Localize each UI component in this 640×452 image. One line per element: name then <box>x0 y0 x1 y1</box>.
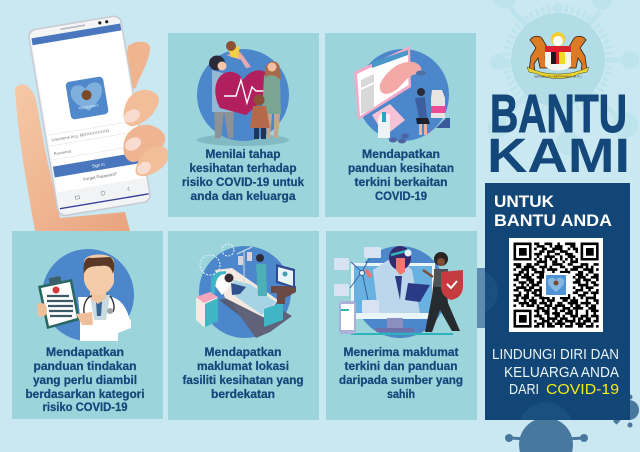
tagline: COVID-19 <box>546 381 619 398</box>
text: yang perlu diambil <box>33 375 137 387</box>
panel 4: facility location <box>168 231 319 420</box>
app icon: MySejahtera <box>78 103 99 111</box>
title: BANTU KAMI <box>487 84 630 183</box>
hand palm <box>15 84 130 231</box>
panel 1: assess health <box>168 33 319 217</box>
text <box>182 347 304 401</box>
panel 2: latest guidance <box>325 33 476 217</box>
text: fasiliti kesihatan yang <box>182 375 304 387</box>
text: Mendapatkan <box>46 347 124 359</box>
phone body <box>27 14 152 217</box>
text: panduan tindakan <box>34 361 136 373</box>
icon: hospital bed <box>196 244 296 338</box>
tagline: DARI <box>509 381 539 398</box>
text: sahih <box>387 389 415 401</box>
text: Mendapatkan <box>362 149 440 161</box>
phone body: Forgot Password? <box>83 171 118 182</box>
icon: monitor with hand, doctor and medicine <box>354 46 450 144</box>
text <box>182 149 305 203</box>
text: panduan kesihatan <box>348 163 454 175</box>
phone body: Password <box>53 148 72 156</box>
text: kesihatan terhadap <box>190 163 296 175</box>
tagline: LINDUNGI DIRI DAN <box>492 346 619 363</box>
text: terkini berkaitan <box>354 177 448 189</box>
heading: BANTU ANDA <box>494 211 612 230</box>
phone body: Username (e.g. 60XXXXXXXXX) <box>51 128 110 142</box>
icon: family with heart <box>197 41 289 146</box>
background virus bottom <box>505 418 588 452</box>
background virus right <box>614 394 639 428</box>
text: risiko COVID-19 untuk <box>182 177 305 189</box>
icon: doctor with clipboard <box>37 249 134 341</box>
text <box>348 149 454 203</box>
text: Menerima maklumat <box>344 347 459 359</box>
text: Menilai tahap <box>206 149 280 161</box>
text: berdekatan <box>211 389 275 401</box>
text: berdasarkan kategori <box>26 389 144 401</box>
heading <box>494 192 612 230</box>
QR centre logo <box>544 273 568 297</box>
sign in button <box>53 152 143 177</box>
text: terkini dan panduan <box>344 361 458 373</box>
text: risiko COVID-19 <box>42 402 128 414</box>
text: Mendapatkan <box>204 347 282 359</box>
panel: QR call to action <box>485 183 630 420</box>
panel 3: action guidance <box>12 231 163 419</box>
thumb and upper finger <box>122 42 150 90</box>
panel 5: latest information <box>326 231 477 420</box>
fingers over phone <box>123 90 159 126</box>
icon: Malaysian coat of arms: BERSEKUTU BERTAMBAH MUTU <box>534 74 582 78</box>
text: daripada sumber yang <box>339 375 463 387</box>
tagline <box>492 346 619 398</box>
phone and hand illustration <box>15 14 169 231</box>
background virus left of blue panel <box>477 268 485 328</box>
icon: telehealth doctor and shielded woman <box>334 246 463 338</box>
text: maklumat lokasi <box>197 361 289 373</box>
text <box>339 347 463 401</box>
title: BANTU KAMI: KAMI <box>487 130 630 183</box>
tagline: KELUARGA ANDA <box>504 364 619 381</box>
heading: UNTUK <box>494 192 555 211</box>
text <box>26 347 144 414</box>
QR code <box>509 238 603 332</box>
icon: Malaysian coat of arms <box>527 32 589 78</box>
text: COVID-19 <box>375 191 427 203</box>
sign in button: Sign In <box>91 161 106 169</box>
text: anda dan keluarga <box>190 191 296 203</box>
app icon <box>65 76 109 120</box>
background virus top right <box>487 0 639 155</box>
